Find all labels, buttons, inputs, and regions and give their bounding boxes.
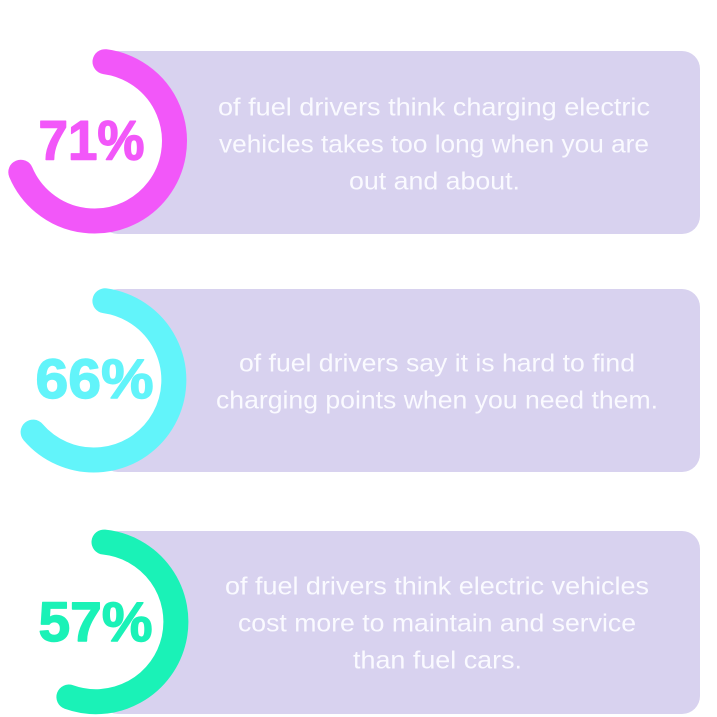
text block: cost more to maintain and service: [238, 610, 636, 638]
number: 71%: 71%: [38, 108, 144, 172]
panel background: [100, 289, 700, 472]
text block: out and about.: [349, 168, 520, 196]
text block: of fuel drivers say it is hard to find: [239, 350, 635, 378]
panel background: [100, 51, 700, 234]
ring chart: 66%: [33, 301, 174, 460]
number: 66%: 66%: [36, 347, 154, 410]
text block: [216, 350, 658, 414]
number: 57%: 57%: [38, 590, 152, 653]
panel background: [100, 531, 700, 714]
white disc: [11, 537, 181, 707]
text block: [218, 94, 650, 196]
panel: charging time statistic: [10, 51, 700, 234]
ring chart: 57%: [69, 542, 176, 702]
text block: of fuel drivers think charging electric: [218, 94, 650, 122]
panel: maintenance cost statistic: [11, 531, 700, 714]
white disc: [10, 56, 180, 226]
text block: [225, 572, 649, 674]
panel: charging points statistic: [9, 289, 700, 472]
text block: than fuel cars.: [353, 646, 522, 674]
white disc: [9, 295, 179, 465]
ring chart: 71%: [21, 62, 174, 221]
text block: vehicles takes too long when you are: [219, 130, 649, 158]
text block: charging points when you need them.: [216, 386, 658, 414]
text block: of fuel drivers think electric vehicles: [225, 572, 649, 600]
